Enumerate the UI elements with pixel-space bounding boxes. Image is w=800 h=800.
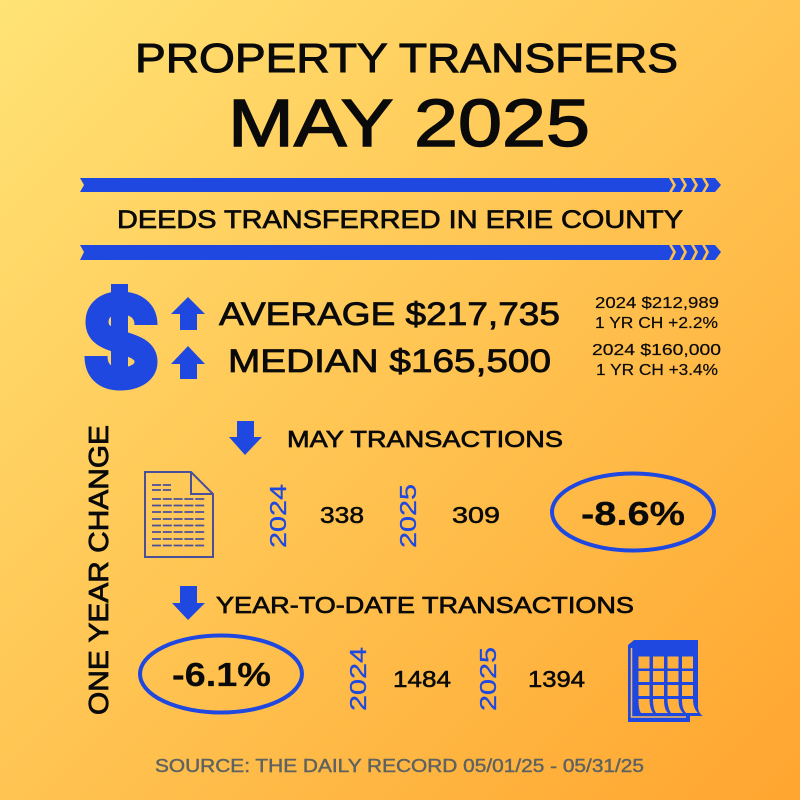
subtitle: deeds transferred: DEEDS TRANSFERRED IN ERIE COUNTY	[117, 206, 683, 234]
average comparison: 1 YR CH +2.2%	[595, 315, 718, 332]
callout: may change	[552, 474, 714, 550]
label: 2024: 2024	[265, 484, 291, 548]
value: 338: 338	[320, 502, 364, 528]
bottom ribbon arrow	[80, 245, 721, 260]
icon: document	[145, 472, 213, 557]
callout: may change: -8.6%	[581, 495, 685, 532]
label: 2025: 2025	[395, 484, 421, 548]
icon: calendar	[628, 640, 703, 722]
top ribbon arrow	[80, 178, 721, 192]
heading: year-to-date transactions: YEAR-TO-DATE TRANSACTIONS	[216, 592, 634, 618]
average comparison	[595, 295, 719, 332]
icon: median up arrow	[171, 346, 205, 379]
callout: ytd change	[140, 636, 302, 712]
value: 1484: 1484	[393, 666, 451, 692]
label: 2025: 2025	[475, 647, 501, 711]
median value: MEDIAN $165,500	[228, 343, 551, 379]
median comparison	[592, 342, 721, 379]
title: may 2025: MAY 2025	[228, 86, 590, 161]
icon: average up arrow	[171, 297, 205, 330]
value: 1394: 1394	[528, 666, 585, 692]
value: 309: 309	[452, 502, 500, 528]
icon: may down arrow	[229, 421, 262, 455]
average value: AVERAGE $217,735	[219, 296, 560, 332]
source note: SOURCE: THE DAILY RECORD 05/01/25 - 05/31/25	[155, 756, 644, 776]
title: property transfers: PROPERTY TRANSFERS	[135, 35, 678, 81]
icon: dollar sign	[96, 284, 146, 389]
label: 2024: 2024	[345, 647, 371, 711]
icon: ytd down arrow	[172, 586, 205, 620]
average comparison: 2024 $212,989	[595, 295, 719, 312]
callout: ytd change: -6.1%	[172, 656, 271, 693]
median comparison: 1 YR CH +3.4%	[596, 362, 718, 379]
vertical label: one year change: ONE YEAR CHANGE	[83, 425, 114, 715]
median comparison: 2024 $160,000	[592, 342, 721, 359]
heading: may transactions: MAY TRANSACTIONS	[287, 426, 563, 452]
